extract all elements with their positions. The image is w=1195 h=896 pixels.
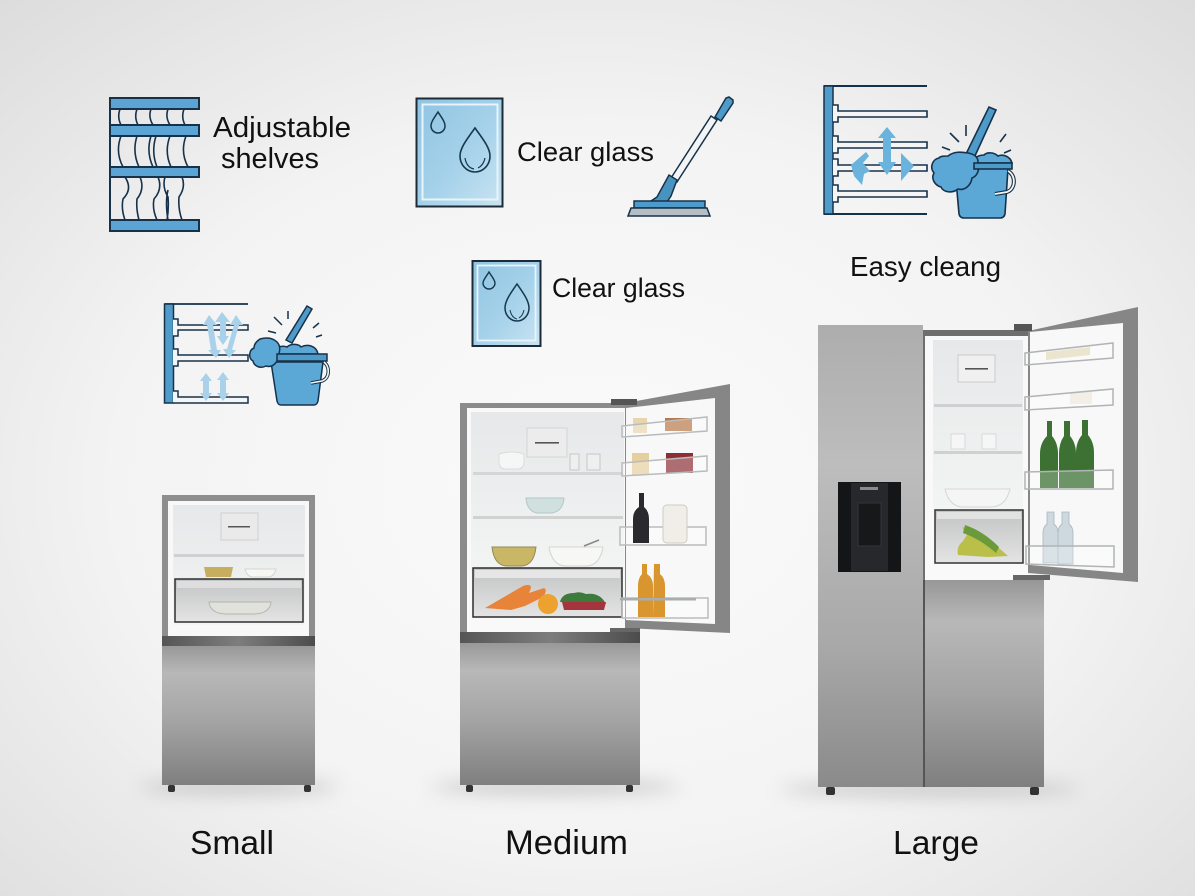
left door — [818, 325, 923, 787]
produce — [958, 527, 1008, 557]
icon: adjustable shelves — [110, 98, 199, 231]
icon: clear glass with drops, middle — [472, 261, 540, 346]
icon: clear glass with drops, top — [416, 98, 502, 206]
panel — [958, 355, 995, 382]
freezer door — [925, 580, 1044, 787]
crisper drawer — [935, 510, 1023, 563]
door jars second — [632, 453, 649, 475]
icon: bucket and foam, left — [250, 306, 328, 405]
lower door — [162, 645, 315, 785]
food bowl — [204, 567, 233, 577]
light arrows — [200, 312, 243, 401]
icon: shelves and arrows, left — [164, 304, 248, 403]
panel — [221, 513, 258, 540]
water dispenser — [838, 482, 901, 572]
label: clear glass, middle: Clear glass — [552, 273, 685, 303]
milk jar — [663, 505, 687, 543]
white serving bowl — [549, 547, 603, 566]
movement arrows — [851, 127, 914, 185]
yellow bowl — [492, 547, 536, 566]
glasses — [570, 454, 600, 470]
door items — [1046, 347, 1090, 360]
salad bowl — [945, 489, 1010, 507]
fridge: small — [139, 495, 339, 794]
door gap — [923, 580, 925, 787]
icon: bucket and foam, top right — [932, 107, 1014, 218]
green bottles — [1040, 420, 1094, 488]
label: large: Large — [893, 825, 979, 862]
label: shelves: shelves — [221, 143, 319, 175]
label: adjustable shelves: Adjustable — [213, 112, 351, 144]
teal bowl — [526, 498, 564, 513]
icon: mop — [628, 97, 733, 216]
juice bottles — [638, 564, 665, 617]
fridge: medium — [430, 384, 730, 794]
crisper drawer — [175, 579, 303, 622]
cups — [951, 434, 996, 449]
label: easy cleaning: Easy cleang — [850, 251, 1001, 282]
white bowl — [499, 452, 524, 469]
door bins — [620, 417, 708, 618]
fridge: large — [780, 307, 1138, 796]
clear bottles — [1043, 512, 1073, 564]
interior — [923, 330, 1028, 582]
label: medium: Medium — [505, 824, 628, 862]
greens — [560, 592, 606, 604]
icon: shelves and arrows, top right — [824, 86, 927, 214]
carrots — [485, 585, 546, 610]
lower door — [460, 642, 640, 785]
panel — [527, 428, 567, 457]
door jars top — [633, 418, 647, 433]
wine bottle — [633, 493, 649, 543]
shelf — [174, 554, 304, 557]
label: small: Small — [190, 825, 274, 862]
door bins — [1025, 343, 1114, 567]
door — [1028, 307, 1138, 582]
crisper drawer — [473, 568, 622, 617]
door — [625, 384, 730, 633]
label: clear glass, top: Clear glass — [517, 137, 654, 167]
